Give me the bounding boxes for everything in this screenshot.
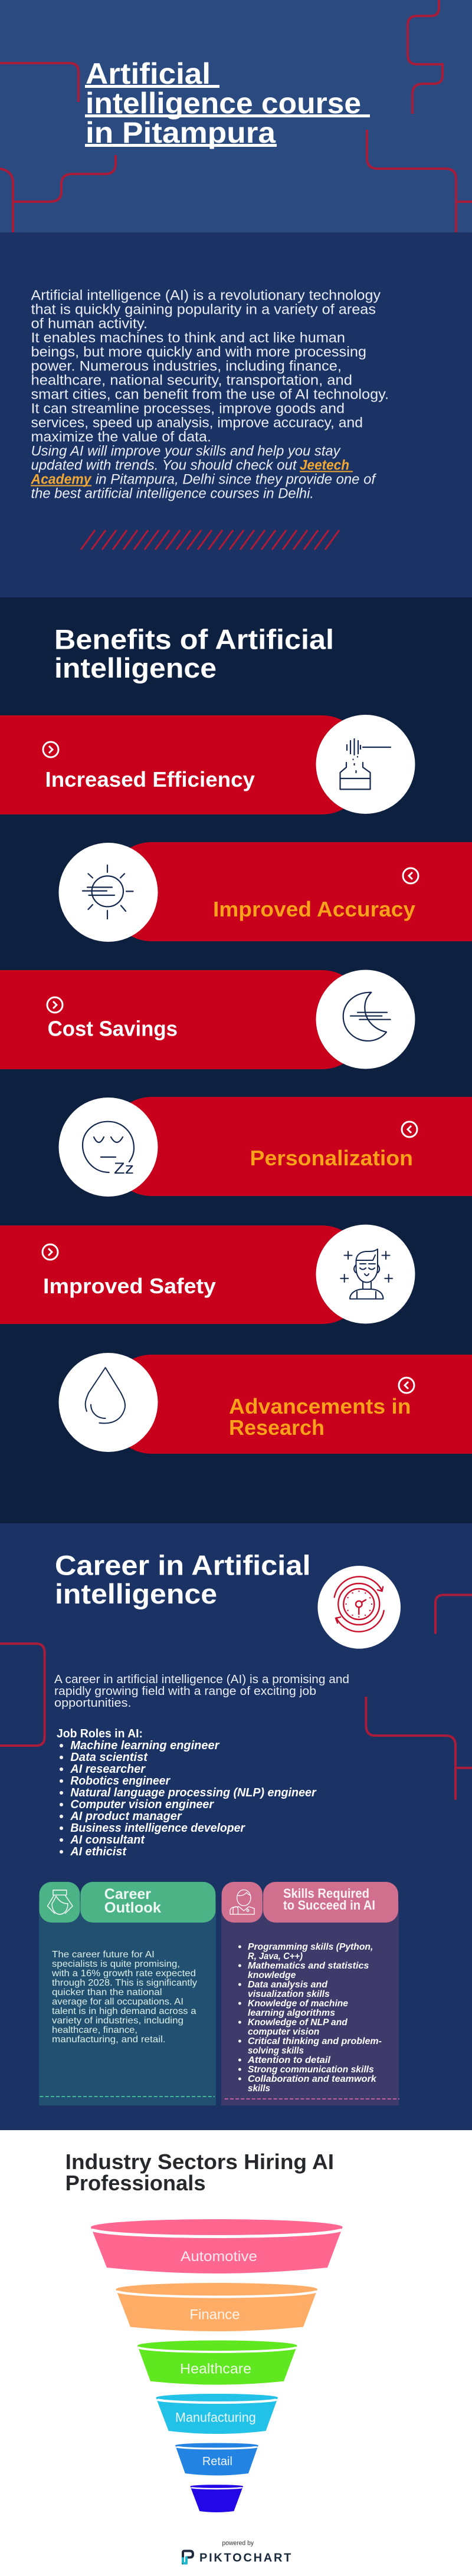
panel: introduction [0, 232, 472, 597]
list: skills: Critical thinking and problem- [248, 2036, 382, 2046]
title: in Pitampura [86, 116, 276, 149]
icon: Piktochart logo [183, 2551, 193, 2563]
footer: Piktochart credit [183, 2540, 291, 2565]
title: Artificial [86, 57, 211, 90]
panel: career [0, 1523, 472, 2130]
text block: introduction: power. Numerous industries, including finance, [31, 359, 342, 374]
heading: industry sectors: Professionals [65, 2171, 205, 2195]
list: skills: Programming skills (Python, [248, 1942, 373, 1952]
funnel tier: Manufacturing: Manufacturing [175, 2410, 256, 2424]
text block: career outlook: through 2028. This is significantly [52, 1978, 197, 1988]
heading: career outlook [104, 1886, 161, 1916]
text block: career intro: opportunities. [54, 1697, 131, 1710]
benefit: Cost Savings: Cost Savings [48, 1017, 178, 1041]
list: skills: Knowledge of machine [248, 1999, 348, 2009]
heading: skills required: Skills Required [283, 1886, 369, 1901]
funnel tier: Retail [175, 2443, 258, 2476]
list: job roles: Computer vision engineer [70, 1798, 214, 1811]
text block: introduction: Jeetech [300, 458, 349, 473]
text block: career outlook: talent is in high demand across a [52, 2006, 196, 2016]
list: job roles: Machine learning engineer [70, 1739, 220, 1752]
text block: introduction: the best artificial intelligence courses in Delhi. [31, 486, 314, 501]
text block: introduction: smart cities, can benefit from the use of AI technology. [31, 387, 389, 402]
title [85, 57, 370, 149]
panel: benefits [0, 597, 472, 1523]
icon: woman [47, 1890, 73, 1914]
list: job roles: AI researcher [70, 1763, 146, 1776]
benefit: Improved Accuracy: Improved Accuracy [213, 897, 415, 921]
list: skills [238, 1942, 382, 2094]
text block: introduction: services, speed up analysis, improve accuracy, and [31, 415, 363, 431]
benefit: Increased Efficiency: Increased Efficiency [45, 767, 255, 791]
text block: career outlook: with a 16% growth rate expected [51, 1969, 196, 1979]
benefit: Improved Accuracy [59, 842, 472, 942]
list: skills: learning algorithms [248, 2008, 335, 2018]
icon: doctor [230, 1890, 254, 1914]
heading: industry sectors: Industry Sectors Hiring AI [65, 2150, 334, 2174]
heading: benefits: Benefits of Artificial [54, 624, 334, 655]
list: skills: Attention to detail [247, 2055, 331, 2065]
funnel chart [90, 2219, 343, 2512]
heading: career: intelligence [55, 1578, 217, 1609]
text block: career outlook: variety of industries, including [52, 2016, 183, 2026]
list: skills: computer vision [248, 2027, 320, 2037]
benefit: Personalization: Personalization [250, 1146, 413, 1170]
footer: Piktochart credit: PIKTOCHART [199, 2552, 291, 2565]
heading: benefits: intelligence [54, 652, 217, 684]
funnel tier: Finance: Finance [189, 2306, 240, 2322]
icon: moon [343, 993, 391, 1041]
list: job roles: Robotics engineer [70, 1775, 171, 1788]
text block: introduction: that is quickly gaining popularity in a variety of areas [31, 302, 376, 317]
funnel tier: Finance [116, 2283, 318, 2331]
benefit: Improved Safety: Improved Safety [43, 1274, 216, 1298]
text block: introduction: in Pitampura, Delhi since they provide one of [96, 472, 376, 487]
heading: career: Career in Artificial [55, 1550, 310, 1581]
funnel tier: Healthcare: Healthcare [180, 2361, 251, 2377]
heading: skills required [283, 1886, 375, 1913]
text block: introduction: It enables machines to think and act like human [31, 330, 345, 346]
list: job roles [57, 1727, 317, 1858]
icon: chevron [403, 868, 418, 883]
list: job roles: AI product manager [70, 1810, 182, 1823]
footer: Piktochart credit: powered by [222, 2540, 254, 2547]
icon: clock [317, 1566, 401, 1649]
text block: career intro [54, 1673, 349, 1710]
text block: introduction: Academy [31, 472, 92, 487]
funnel tier: base [190, 2485, 244, 2512]
panel: industry sectors [0, 2130, 472, 2576]
list: skills: solving skills [248, 2046, 304, 2056]
icon: flask [340, 739, 391, 789]
benefit: Personalization [59, 1097, 472, 1197]
funnel tier: Retail: Retail [202, 2455, 232, 2468]
text block: career intro: rapidly growing field with a range of exciting job [54, 1685, 316, 1698]
icon: water drop [86, 1368, 125, 1423]
benefit: Advancements in Research: Advancements in [229, 1394, 411, 1418]
text block: career outlook [51, 1950, 197, 2045]
card: skills required [221, 1882, 399, 2105]
list: job roles: Job Roles in AI: [57, 1727, 143, 1740]
text block: career outlook: The career future for AI [52, 1950, 155, 1960]
icon: sleeping face [83, 1122, 134, 1177]
icon: sleeping face: Zz [114, 1159, 134, 1177]
icon: man [340, 1249, 392, 1299]
icon: chevron [42, 1244, 58, 1260]
icon: chevron [43, 742, 58, 757]
funnel tier: Healthcare [137, 2340, 297, 2385]
text block: career intro: A career in artificial intelligence (AI) is a promising and [54, 1673, 349, 1686]
text block: introduction: Artificial intelligence (AI) is a revolutionary technology [31, 288, 381, 303]
text block: introduction [31, 288, 389, 501]
heading: skills required: to Succeed in AI [283, 1898, 375, 1913]
icon: sun [83, 865, 133, 919]
benefit: Increased Efficiency [0, 715, 415, 814]
heading: career outlook: Career [104, 1886, 151, 1903]
text block: career outlook: average for all occupations. AI [52, 1997, 183, 2007]
list: skills: Mathematics and statistics [248, 1961, 369, 1971]
heading: career [55, 1550, 310, 1609]
list: skills: R, Java, C++) [248, 1951, 303, 1961]
text block: introduction: beings, but more quickly and with more processing [31, 344, 366, 360]
text block: career outlook: manufacturing, and retail. [52, 2035, 166, 2045]
text block: career outlook: healthcare, finance, [52, 2025, 137, 2035]
list: skills: visualization skills [248, 1989, 330, 1999]
text block: career outlook: specialists is quite promising, [52, 1959, 180, 1969]
funnel tier: Automotive: Automotive [181, 2249, 257, 2265]
benefit: Advancements in Research: Research [229, 1415, 324, 1440]
panel: title banner [0, 0, 472, 232]
icon: chevron [402, 1122, 417, 1137]
icon: chevron [399, 1378, 414, 1393]
funnel tier: Manufacturing [156, 2394, 278, 2434]
list: job roles: AI ethicist [70, 1845, 127, 1858]
text block: introduction: It can streamline processes, improve goods and [31, 401, 345, 416]
list: skills: Strong communication skills [248, 2065, 374, 2075]
list: skills: Knowledge of NLP and [248, 2018, 348, 2028]
heading: career outlook: Outlook [104, 1900, 161, 1916]
text block: introduction: updated with trends. You should check out [31, 458, 297, 473]
text block: introduction: maximize the value of data. [31, 429, 211, 445]
text block: introduction: Using AI will improve your skills and help you stay [31, 443, 341, 459]
list: job roles: AI consultant [70, 1834, 145, 1846]
text block: career outlook: quicker than the national [52, 1987, 162, 1997]
list: job roles: Data scientist [70, 1751, 148, 1764]
icon: chevron [47, 997, 63, 1013]
heading: industry sectors [65, 2150, 334, 2195]
benefit: Improved Safety [0, 1224, 415, 1324]
heading: benefits [54, 624, 334, 684]
list: skills: knowledge [248, 1970, 296, 1980]
benefit: Cost Savings [0, 970, 415, 1069]
list: skills: Collaboration and teamwork [248, 2074, 377, 2084]
list: skills: skills [248, 2084, 270, 2094]
text block: introduction: of human activity. [31, 316, 148, 331]
list: job roles: Natural language processing (NLP) engineer [70, 1786, 317, 1799]
list: job roles: Business intelligence developer [70, 1822, 245, 1835]
text block: introduction: healthcare, national security, transportation, and [31, 373, 352, 388]
funnel tier: Automotive [90, 2219, 343, 2273]
card: career outlook [39, 1882, 216, 2105]
benefit: Advancements in Research [59, 1353, 472, 1454]
list: skills: Data analysis and [248, 1980, 328, 1990]
title: intelligence course [86, 87, 361, 120]
